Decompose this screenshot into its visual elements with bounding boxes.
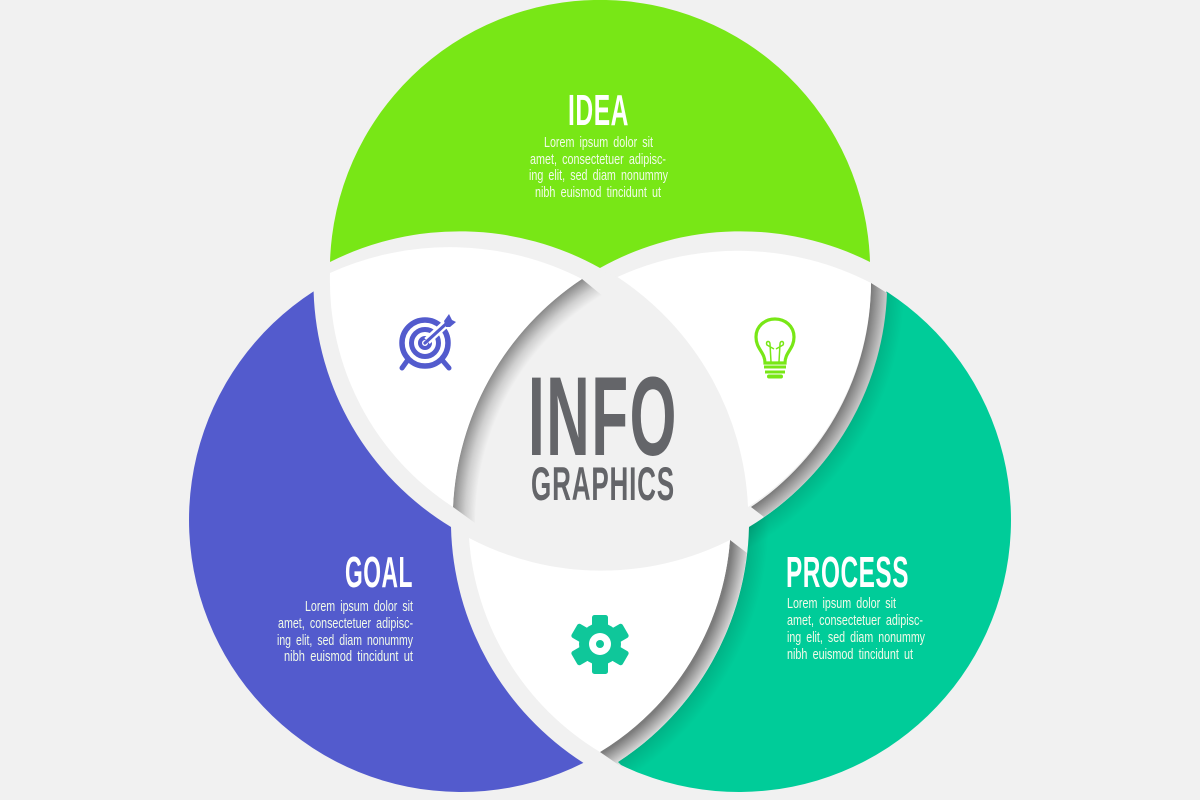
text block: process: ing elit, sed diam nonummy xyxy=(787,629,925,646)
panel: white lens idea/process xyxy=(618,251,871,507)
icon: light bulb xyxy=(756,319,794,376)
text block: goal: ing elit, sed diam nonummy xyxy=(277,632,413,649)
title: INFO: INFO xyxy=(528,354,678,479)
panel: goal (blue segment) xyxy=(189,291,583,792)
panel: white lens goal/idea xyxy=(330,247,582,507)
panel: process (teal segment) xyxy=(618,291,1011,792)
shadow: right lens xyxy=(751,283,887,517)
text block: goal: amet, consectetuer adipisc- xyxy=(278,615,413,632)
text block: process: amet, consectetuer adipisc- xyxy=(787,612,923,629)
text block: goal xyxy=(277,598,414,665)
text block: process: Lorem ipsum dolor sit xyxy=(787,595,897,612)
heading: idea: IDEA xyxy=(568,86,629,135)
shadow: bottom lens xyxy=(600,540,747,770)
text block: process: nibh euismod tincidunt ut xyxy=(787,646,914,663)
text block: idea: ing elit, sed diam nonummy xyxy=(529,167,668,184)
text block: process xyxy=(787,595,925,663)
heading: goal: GOAL xyxy=(345,548,413,597)
panel: idea (green segment) xyxy=(330,0,870,268)
text block: idea: amet, consectetuer adipisc- xyxy=(530,151,666,168)
text block: idea: Lorem ipsum dolor sit xyxy=(544,134,654,151)
text block: goal: nibh euismod tincidunt ut xyxy=(284,648,414,665)
panel: center lens xyxy=(451,270,749,571)
subtitle: GRAPHICS: GRAPHICS xyxy=(531,457,675,510)
icon: target xyxy=(402,314,456,368)
icon: gear xyxy=(570,615,630,674)
text block: idea: nibh euismod tincidunt ut xyxy=(535,184,662,201)
panel: white lens goal/process xyxy=(469,538,730,752)
heading: process: PROCESS xyxy=(786,548,909,597)
text block: idea xyxy=(529,134,668,201)
text block: goal: Lorem ipsum dolor sit xyxy=(305,598,414,615)
